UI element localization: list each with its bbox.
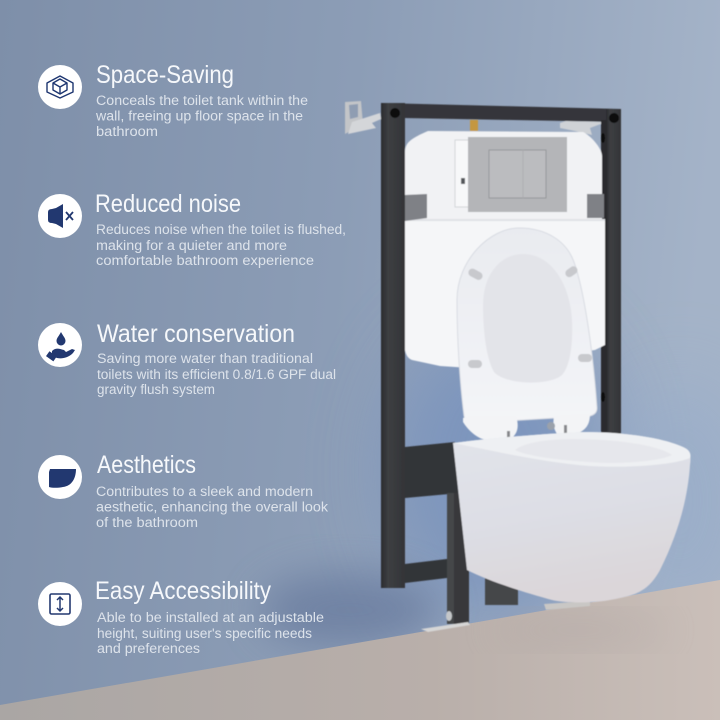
brass inlet <box>470 120 478 131</box>
seat opening <box>483 254 572 383</box>
feature: Aesthetics <box>38 451 328 530</box>
description: Able to be installed at an adjustable <box>97 610 324 625</box>
concealed tank <box>405 120 605 368</box>
feature: Space-Saving <box>38 61 308 139</box>
side panel <box>455 140 469 207</box>
description: wall, freeing up floor space in the <box>95 108 303 124</box>
tank clip: left <box>405 194 427 221</box>
toilet seat <box>457 228 597 440</box>
heading: Water conservation <box>97 320 295 348</box>
description: comfortable bathroom experience <box>96 253 314 268</box>
description: Contributes to a sleek and modern <box>96 484 313 499</box>
tank clip: right <box>587 194 604 218</box>
description: and preferences <box>97 641 200 656</box>
flush plate <box>468 137 567 212</box>
icon: height adjustment arrow <box>38 582 82 626</box>
feature: Easy Accessibility <box>38 577 324 656</box>
bowl top surface <box>453 432 690 467</box>
drain pipe <box>485 578 518 605</box>
description: Conceals the toilet tank within the <box>96 93 308 108</box>
icon: muted speaker <box>38 194 82 238</box>
description: height, suiting user's specific needs <box>97 626 312 641</box>
floor <box>0 580 720 720</box>
description: bathroom <box>96 124 158 139</box>
seat bumpers <box>467 265 592 368</box>
wall bracket: right <box>560 121 606 135</box>
heading: Space-Saving <box>96 61 234 89</box>
bowl rim opening <box>515 439 672 463</box>
description: of the bathroom <box>96 515 198 530</box>
heading: Reduced noise <box>95 190 241 218</box>
icon: toilet silhouette <box>38 455 82 499</box>
description: Reduces noise when the toilet is flushed, <box>96 222 346 237</box>
wall bracket: left <box>345 101 381 134</box>
description: aesthetic, enhancing the overall look <box>96 500 328 514</box>
feature: Water conservation <box>38 320 336 397</box>
icon: cube in hexagon <box>38 65 82 109</box>
black frame <box>381 103 621 624</box>
toilet installation <box>345 101 690 632</box>
wall-hung bowl <box>453 432 690 602</box>
description: Saving more water than traditional <box>97 351 313 366</box>
description: gravity flush system <box>97 382 215 397</box>
feature: Reduced noise <box>38 190 346 268</box>
description: toilets with its efficient 0.8/1.6 GPF dual <box>97 367 336 382</box>
hinges <box>463 414 590 440</box>
icon: water drop over hand <box>38 323 82 367</box>
description: making for a quieter and more <box>96 238 287 253</box>
heading: Easy Accessibility <box>95 577 271 605</box>
floor foot and bolt <box>421 601 590 632</box>
heading: Aesthetics <box>97 451 196 479</box>
